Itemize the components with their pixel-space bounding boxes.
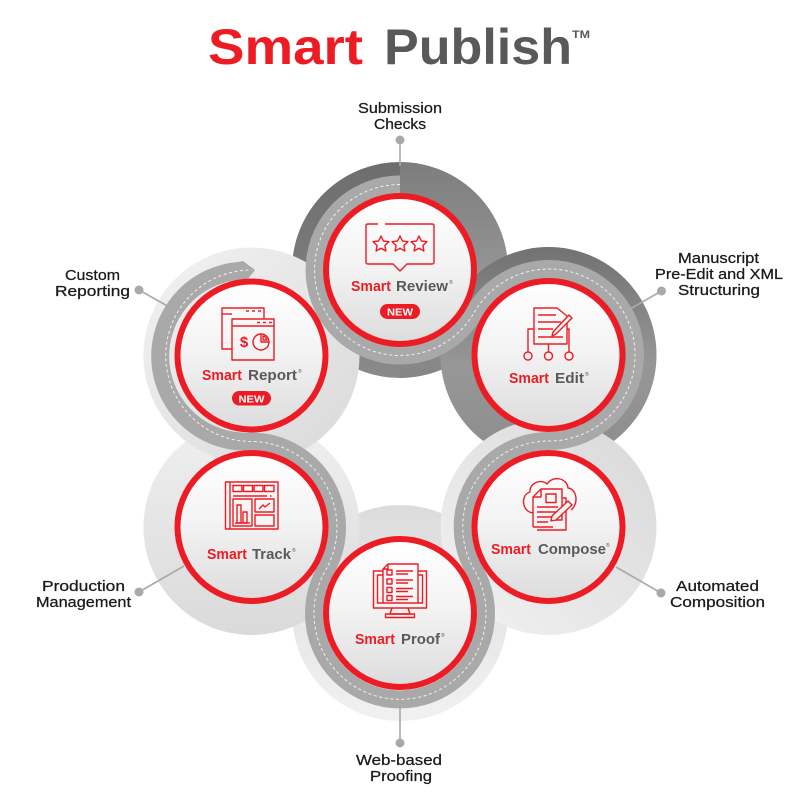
name: Smart — [202, 368, 242, 384]
node: Smart Compose — [474, 453, 622, 601]
name — [207, 547, 296, 563]
name: ® — [441, 632, 445, 639]
node: Smart Report — [178, 282, 326, 430]
label: Web-based Proofing: Proofing — [370, 769, 432, 785]
disc: review left — [292, 162, 400, 378]
badge: new: NEW — [238, 393, 265, 405]
label: Production Management — [36, 579, 131, 611]
label: Submission Checks: Checks — [374, 117, 426, 133]
name — [355, 632, 445, 648]
name: Smart — [207, 547, 247, 563]
name: Track — [252, 547, 292, 563]
title — [208, 19, 590, 75]
label: Submission Checks — [358, 101, 442, 133]
name: Review — [396, 279, 449, 295]
badge: new — [380, 304, 420, 319]
name: ® — [606, 542, 610, 549]
name: Smart — [355, 632, 395, 648]
icon: monitor with checklist — [374, 564, 426, 618]
name: ® — [298, 368, 302, 375]
label: Automated Composition: Automated — [676, 579, 759, 595]
label: Automated Composition — [670, 579, 765, 611]
disc: track — [144, 419, 360, 635]
icon: report windows — [222, 308, 274, 360]
node: Smart Track — [178, 453, 326, 601]
name: Report — [248, 368, 297, 384]
name — [202, 368, 302, 384]
name: Compose — [538, 542, 606, 558]
name — [491, 542, 610, 558]
road — [160, 184, 635, 699]
name: ® — [449, 279, 453, 286]
name: Smart — [351, 279, 391, 295]
title: TM — [572, 29, 590, 41]
icon: document with branches — [524, 308, 573, 360]
badge: new: NEW — [387, 306, 413, 318]
label: Submission Checks: Submission — [358, 101, 442, 117]
node: Smart Review — [326, 196, 474, 344]
label: Manuscript Pre-Edit and XML Structuring: Structuring — [678, 283, 760, 299]
label: Manuscript Pre-Edit and XML Structuring — [655, 251, 783, 299]
label: Production Management: Management — [36, 595, 131, 611]
disc: edit — [440, 247, 656, 463]
name — [509, 371, 589, 387]
label: Custom Reporting — [55, 268, 130, 300]
label: Automated Composition: Composition — [670, 595, 765, 611]
disc: compose — [440, 419, 656, 635]
title: Publish — [384, 19, 572, 75]
name — [351, 279, 453, 295]
name: Proof — [401, 632, 440, 648]
label: Web-based Proofing — [356, 753, 442, 785]
icon: cloud with document — [524, 479, 576, 530]
icon: speech bubble with stars — [366, 224, 434, 271]
label: Manuscript Pre-Edit and XML Structuring: Manuscript — [678, 251, 759, 267]
icon: report windows: $ — [240, 334, 249, 351]
icon: dashboard — [226, 482, 278, 529]
node: Smart Proof — [326, 539, 474, 687]
badge: new — [232, 391, 271, 406]
connector lines and dots — [134, 136, 666, 748]
name: Smart — [509, 371, 549, 387]
title: Smart — [208, 19, 363, 75]
label: Production Management: Production — [42, 579, 125, 595]
disc: report — [144, 248, 360, 464]
disc: review right — [400, 162, 508, 378]
disc: proof — [292, 505, 508, 721]
node: Smart Edit — [474, 281, 622, 429]
name: Smart — [491, 542, 531, 558]
label: Manuscript Pre-Edit and XML Structuring: Pre-Edit and XML — [655, 267, 783, 283]
name: ® — [292, 547, 296, 554]
label: Custom Reporting: Custom — [65, 268, 120, 284]
label: Web-based Proofing: Web-based — [356, 753, 442, 769]
background discs — [144, 162, 656, 721]
name: Edit — [555, 371, 584, 387]
name: ® — [585, 371, 589, 378]
label: Custom Reporting: Reporting — [55, 284, 130, 300]
